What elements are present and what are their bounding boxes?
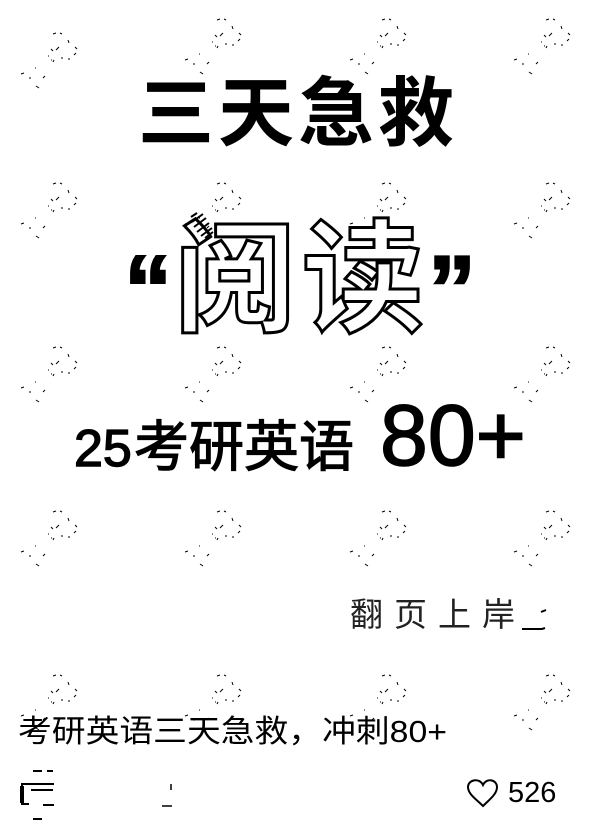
hatch mark on first character xyxy=(191,213,213,238)
underline stroke xyxy=(522,610,546,629)
like counter xyxy=(468,777,556,809)
title: 三天急救 xyxy=(138,72,458,157)
subtitle: 25 xyxy=(74,420,132,478)
caption: 考研英语三天急救，冲刺80+ xyxy=(18,714,447,749)
icon: heart xyxy=(468,780,497,806)
outlined heading text: 阅读 xyxy=(174,212,430,348)
subtitle: 考研英语 xyxy=(134,416,354,478)
heading: outlined characters with quotation marks xyxy=(124,212,476,348)
like count: 526 xyxy=(508,777,556,809)
closing quotation mark: ” xyxy=(428,236,476,343)
watermark pattern xyxy=(21,19,570,730)
handwritten note: 翻页上岸 xyxy=(350,596,515,633)
opening quotation mark: “ xyxy=(124,236,172,343)
subtitle xyxy=(74,388,526,484)
username fragment xyxy=(162,784,172,806)
subtitle: 80+ xyxy=(380,388,526,484)
icon: avatar fragment xyxy=(21,771,54,819)
